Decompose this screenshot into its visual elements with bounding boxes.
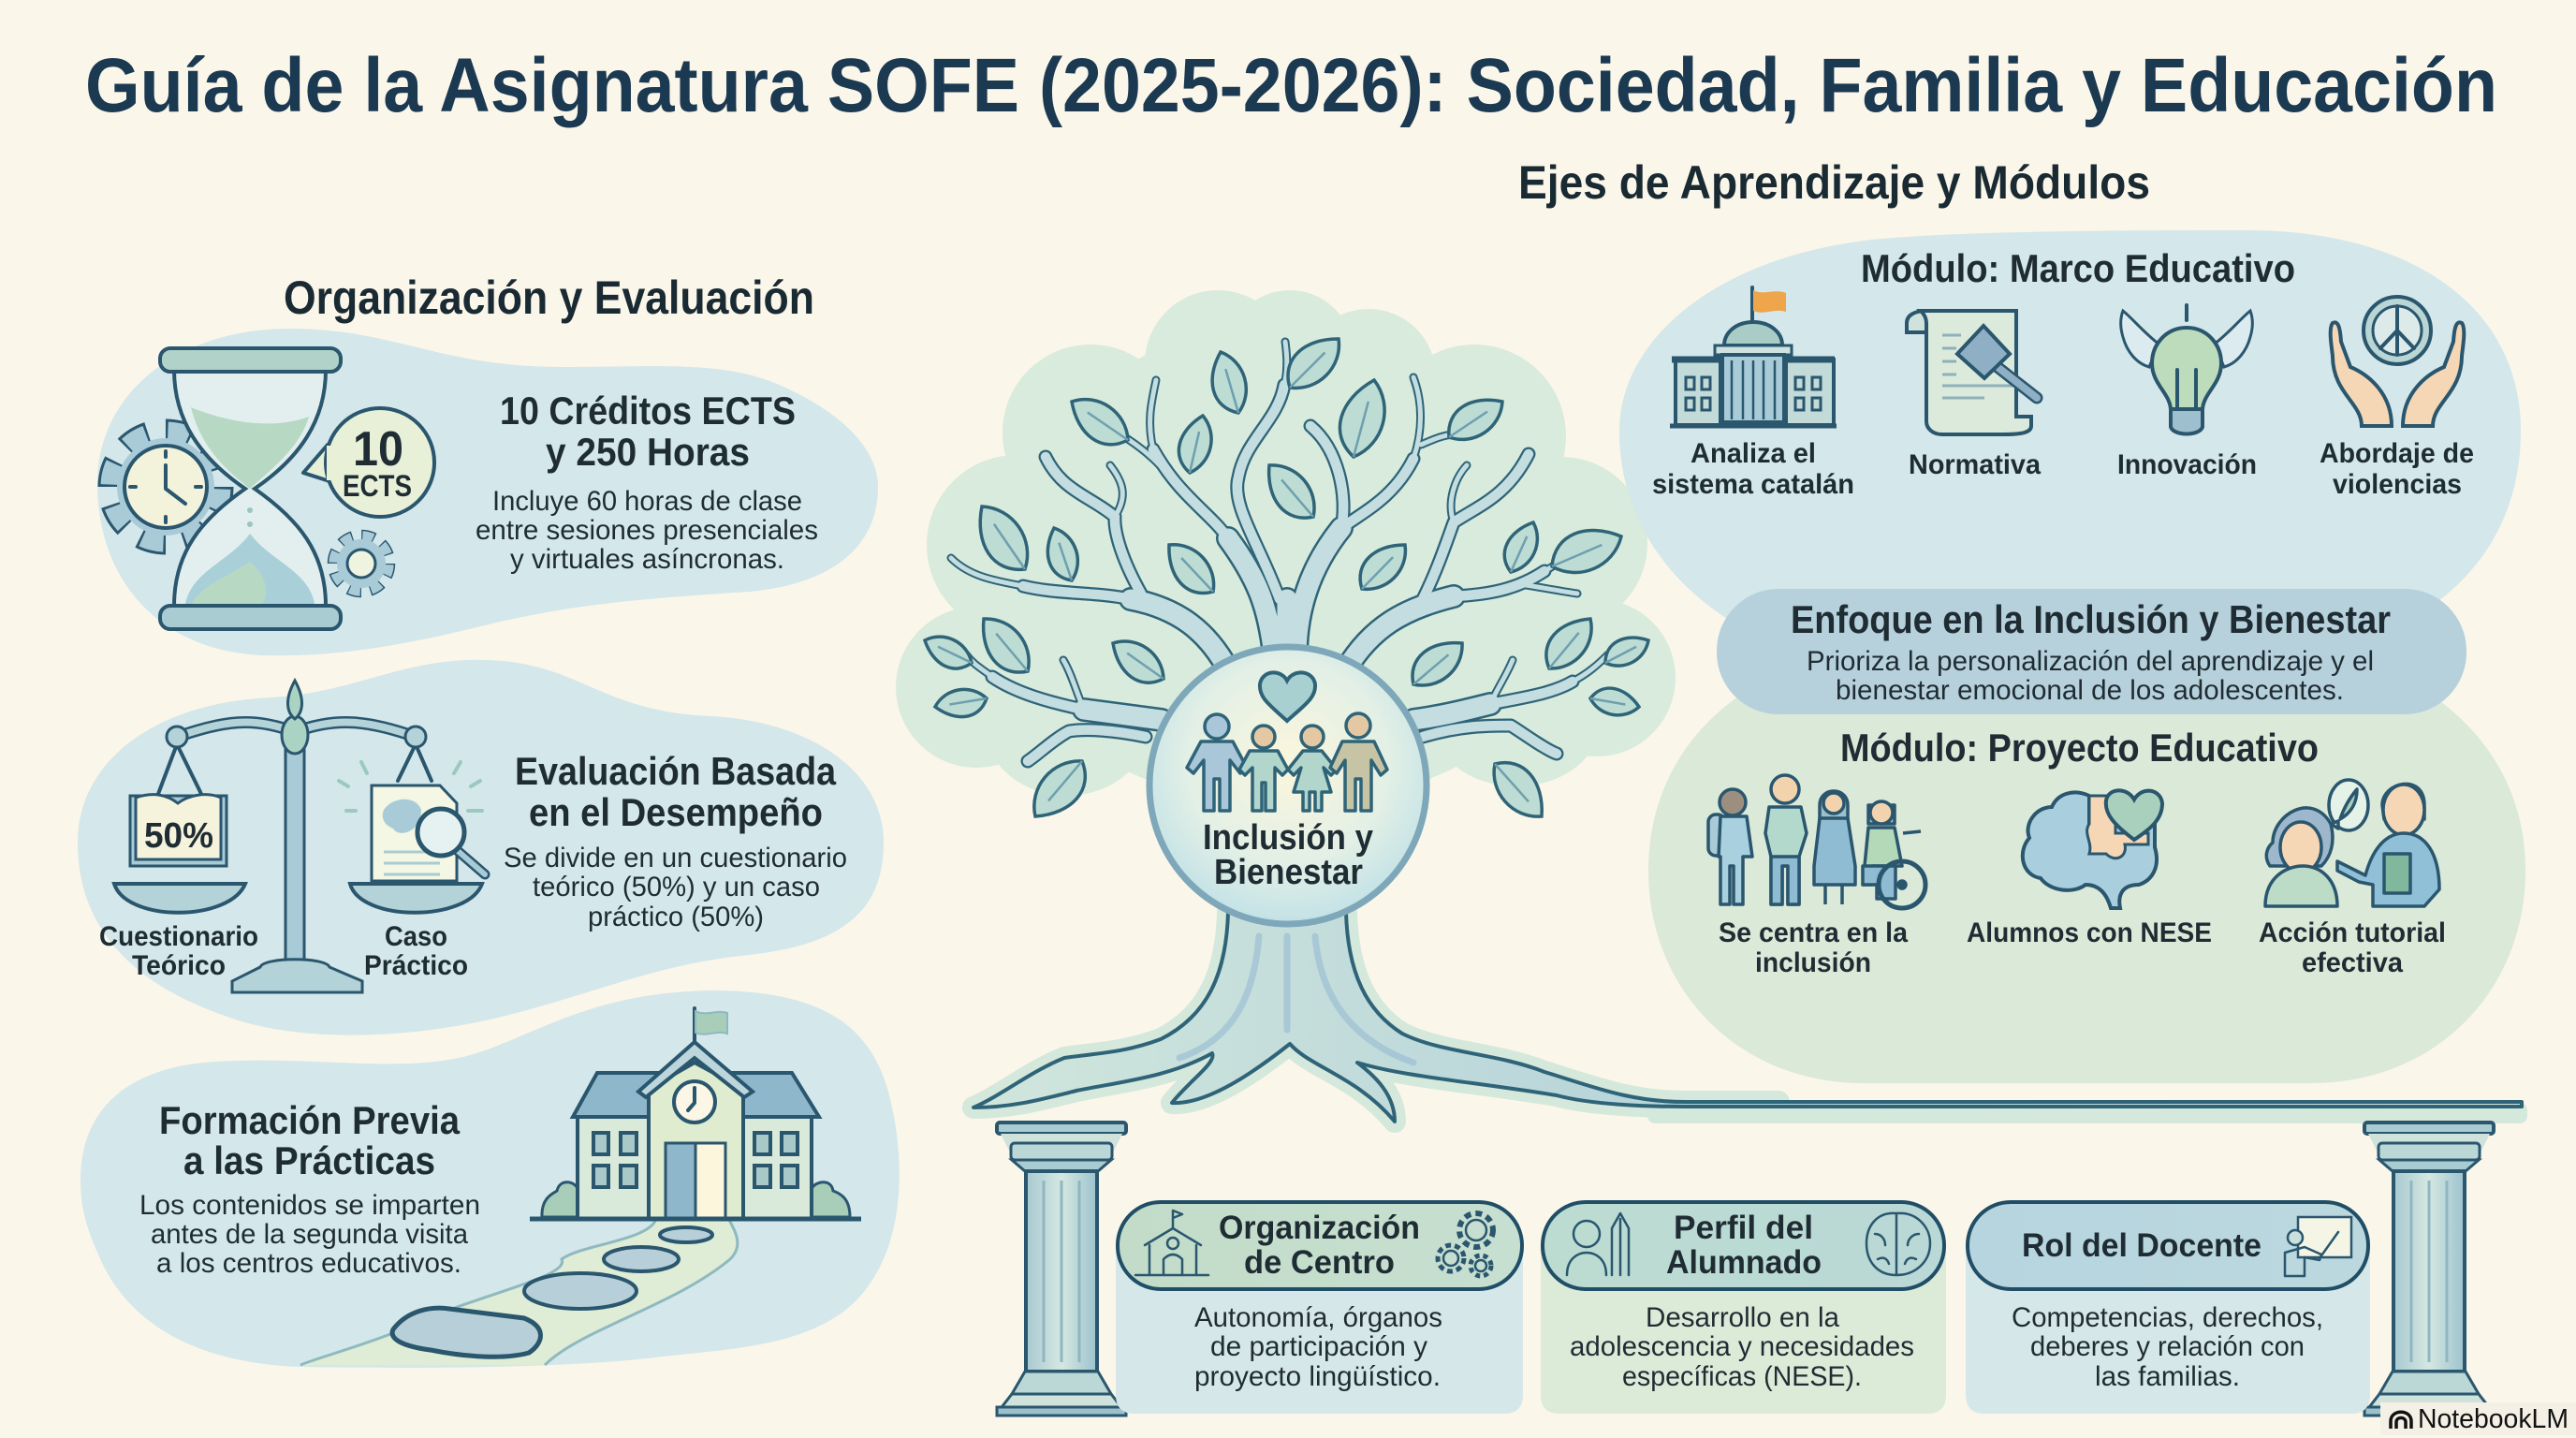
tree branches [951, 342, 1608, 761]
icon: diverse group [1708, 775, 1925, 908]
panel: módulo marco educativo [1619, 230, 2521, 627]
text: perfil heading: Alumnado [1666, 1244, 1822, 1281]
icon: hands with peace sign [2331, 297, 2464, 426]
icon: heart [1260, 672, 1315, 721]
text: organización body [1194, 1302, 1442, 1392]
pillar right [2364, 1123, 2494, 1416]
icon: clock gear [110, 431, 222, 543]
panel: formación previa [80, 990, 900, 1368]
icon: school outline [1135, 1211, 1208, 1275]
labels: balanza [99, 921, 468, 981]
text: créditos [476, 389, 818, 575]
text: formación: a las Prácticas [183, 1138, 435, 1182]
text: evaluación: Evaluación Basada [515, 749, 837, 793]
labels: proyecto educativo: Se centra en la [1719, 917, 1908, 948]
icon: light bulb with wings [2121, 305, 2252, 434]
orb label [1203, 818, 1373, 892]
text: formación: antes de la segunda visita [151, 1219, 468, 1250]
pillar left [997, 1123, 1126, 1416]
tree ground band [1647, 1103, 2527, 1123]
icon: student growth outline [1567, 1213, 1629, 1275]
text: evaluación: Se divide en un cuestionario [504, 843, 847, 873]
text: evaluación: en el Desempeño [529, 790, 823, 834]
icon: gears outline [1438, 1213, 1493, 1276]
text: evaluación: teórico (50%) y un caso [533, 872, 820, 902]
card: organización de centro [1116, 1202, 1523, 1414]
labels: balanza: Caso [385, 921, 447, 952]
orb label: Bienestar [1214, 853, 1363, 892]
text: organización heading: Organización [1219, 1210, 1420, 1246]
text: perfil body: específicas (NESE). [1622, 1361, 1862, 1392]
tree root halo [973, 913, 1778, 1122]
icon: 10 ECTS bubble: ECTS [343, 469, 412, 503]
tree trunk and roots [973, 913, 2522, 1122]
icon: 10 ECTS bubble [303, 408, 434, 517]
text: rol body [2012, 1302, 2323, 1392]
text: perfil heading [1666, 1210, 1822, 1281]
icon: teacher at board [2285, 1217, 2351, 1276]
icon: hourglass [160, 348, 341, 629]
labels: marco educativo: Normativa [1909, 449, 2041, 480]
callout: enfoque en la inclusión [1717, 589, 2466, 714]
text: rol body: las familias. [2095, 1361, 2240, 1392]
panel: módulo proyecto educativo [1648, 674, 2525, 1083]
text: organización heading: de Centro [1244, 1244, 1395, 1281]
icon: brain puzzle and heart [2023, 790, 2162, 908]
labels: proyecto educativo [1719, 917, 2446, 978]
trunk shading [1179, 936, 1413, 1063]
panel: créditos ECTS [97, 329, 878, 655]
text: perfil body: Desarrollo en la [1646, 1302, 1839, 1333]
labels: proyecto educativo: efectiva [2302, 947, 2403, 978]
labels: marco educativo: sistema catalán [1652, 469, 1854, 500]
heading: organización y evaluación: Organización y Evaluación [284, 271, 814, 324]
icon: document with magnifier [339, 762, 485, 913]
text: formación: a los centros educativos. [156, 1248, 461, 1279]
text: perfil heading: Perfil del [1674, 1210, 1813, 1246]
panel: evaluación [78, 660, 884, 1035]
labels: marco educativo: Analiza el [1690, 438, 1816, 469]
icon: government building [1670, 287, 1837, 426]
callout: enfoque en la inclusión: Prioriza la personalización del aprendizaje y el [1807, 646, 2374, 677]
text: perfil body [1570, 1302, 1914, 1392]
text: créditos: entre sesiones presenciales [476, 515, 818, 546]
labels: proyecto educativo: Alumnos con NESE [1967, 917, 2212, 948]
icon: scales [158, 681, 432, 992]
labels: marco educativo: Abordaje de [2320, 438, 2474, 469]
text: organización heading [1219, 1210, 1420, 1281]
text: evaluación: práctico (50%) [588, 902, 764, 932]
text: formación: Formación Previa [159, 1098, 461, 1142]
heading: marco educativo: Módulo: Marco Educativo [1861, 246, 2295, 290]
text: evaluación [504, 749, 847, 932]
labels: balanza: Práctico [364, 950, 468, 981]
text: rol body: deberes y relación con [2030, 1331, 2305, 1362]
labels: proyecto educativo: Acción tutorial [2259, 917, 2446, 948]
heading: proyecto educativo: Módulo: Proyecto Educativo [1840, 726, 2319, 770]
card: rol del docente [1966, 1202, 2370, 1414]
text: organización body: de participación y [1210, 1331, 1427, 1362]
callout: enfoque en la inclusión: bienestar emocional de los adolescentes. [1836, 675, 2344, 706]
tree canopy [896, 290, 1676, 805]
labels: balanza: Teórico [132, 950, 226, 981]
labels: marco educativo [1652, 438, 2474, 500]
text: rol body: Competencias, derechos, [2012, 1302, 2323, 1333]
text: créditos: 10 Créditos ECTS [500, 389, 796, 433]
text: créditos: y virtuales asíncronas. [510, 544, 784, 575]
card: perfil del alumnado [1541, 1202, 1946, 1414]
central orb [1149, 647, 1427, 924]
heading: ejes de aprendizaje: Ejes de Aprendizaje y Módulos [1518, 156, 2150, 209]
labels: balanza: Cuestionario [99, 921, 258, 952]
text: formación [139, 1098, 480, 1279]
tree leaves [918, 326, 1654, 829]
labels: marco educativo: Innovación [2117, 449, 2257, 480]
text: créditos: y 250 Horas [546, 430, 750, 474]
text: perfil body: adolescencia y necesidades [1570, 1331, 1914, 1362]
icon: four people [1187, 713, 1387, 811]
NotebookLM badge: NotebookLM [2418, 1404, 2569, 1434]
text: organización body: proyecto lingüístico. [1194, 1361, 1441, 1392]
text: créditos: Incluye 60 horas de clase [492, 486, 802, 517]
icon: small gear [333, 536, 389, 592]
labels: marco educativo: violencias [2333, 469, 2462, 500]
icon: scroll and gavel [1907, 311, 2037, 434]
icon: book 50% [114, 795, 245, 913]
text: formación: Los contenidos se imparten [139, 1190, 480, 1221]
orb label: Inclusión y [1203, 818, 1373, 858]
icon: school [530, 1008, 861, 1219]
text: organización body: Autonomía, órganos [1194, 1302, 1442, 1333]
text: rol heading: Rol del Docente [2022, 1227, 2261, 1264]
callout: enfoque en la inclusión: Enfoque en la Inclusión y Bienestar [1791, 597, 2391, 641]
icon: teacher and student [2265, 780, 2439, 906]
tree [896, 290, 2527, 1123]
icon: brain outline [1866, 1213, 1930, 1275]
icon: 10 ECTS bubble: 10 [353, 422, 403, 477]
labels: proyecto educativo: inclusión [1755, 947, 1871, 978]
icon: book 50%: 50% [144, 816, 213, 856]
icon: path with stones [300, 1220, 738, 1365]
